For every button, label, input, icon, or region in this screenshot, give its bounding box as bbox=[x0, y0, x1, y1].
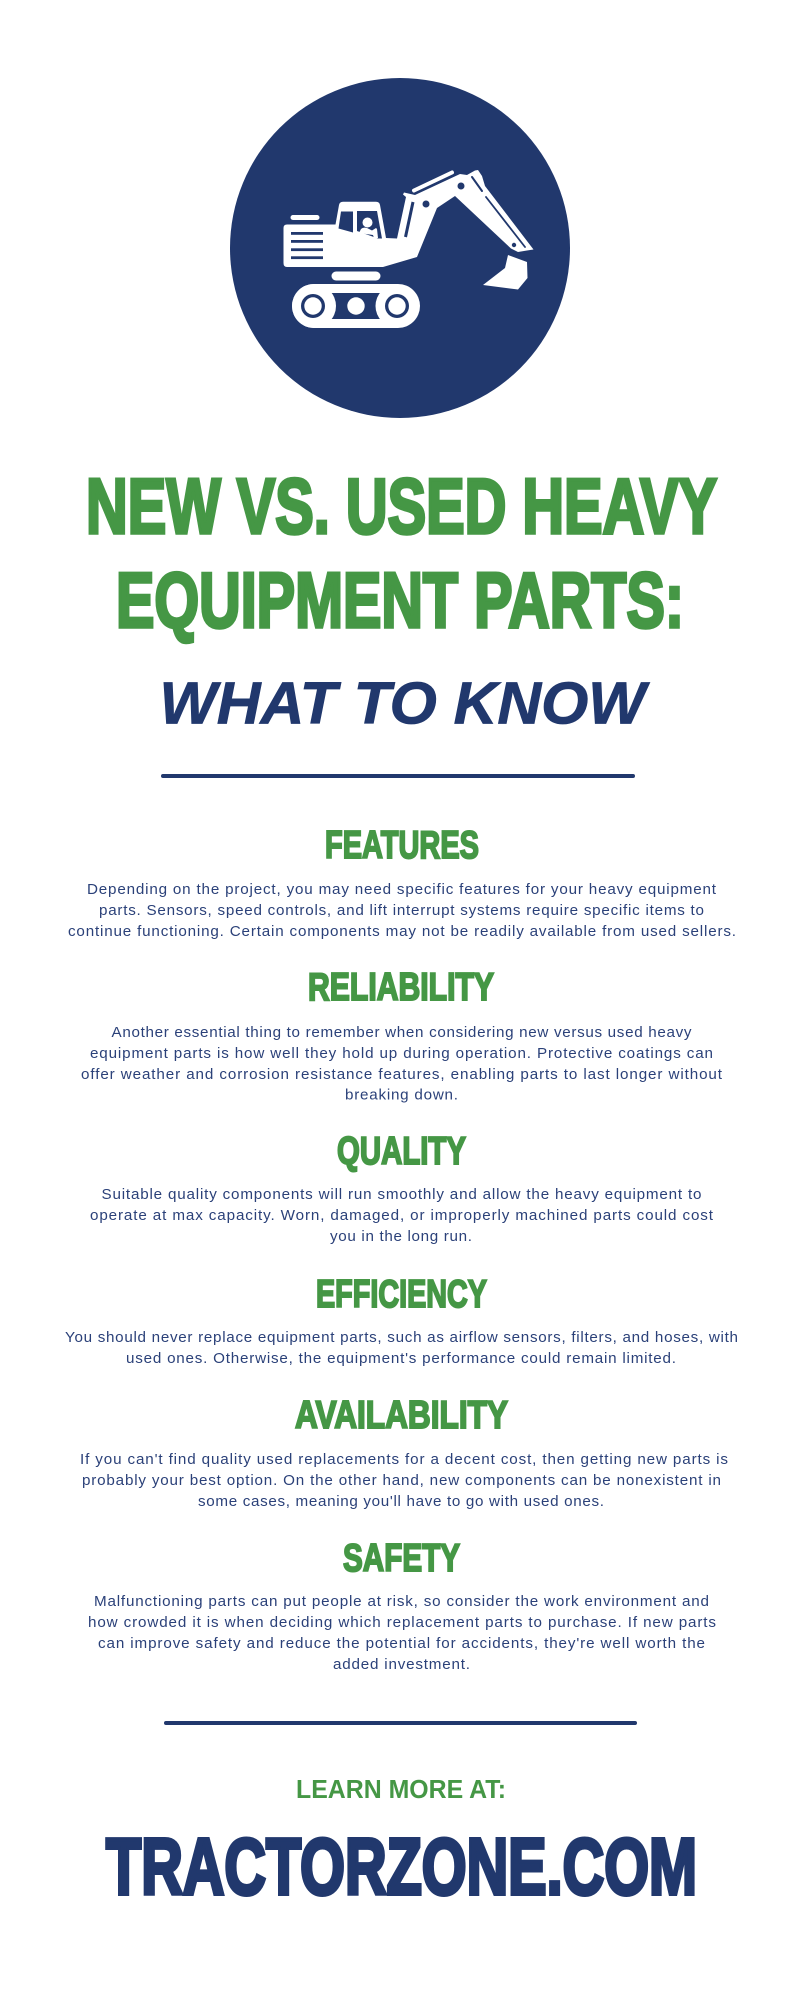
text block: features: Depending on the project, you may need specific features for your heavy equipment bbox=[87, 881, 717, 898]
text block: quality: you in the long run. bbox=[330, 1228, 472, 1245]
heading: efficiency: EFFICIENCY bbox=[316, 1273, 487, 1316]
text block: reliability: Another essential thing to remember when considering new versus used heavy bbox=[112, 1024, 692, 1041]
text block: reliability: offer weather and corrosion resistance features, enabling parts to last longer without bbox=[81, 1066, 723, 1083]
text block: safety: Malfunctioning parts can put people at risk, so consider the work environment and bbox=[94, 1593, 709, 1610]
panel: efficiency bbox=[65, 1273, 738, 1367]
text block: safety: how crowded it is when deciding which replacement parts to purchase. If new parts bbox=[88, 1614, 716, 1631]
text block: safety bbox=[88, 1593, 716, 1673]
text block: quality bbox=[90, 1186, 714, 1245]
text block: availability: probably your best option. On the other hand, new components can be nonexistent in bbox=[82, 1472, 721, 1489]
text block: availability: some cases, meaning you'll have to go with used ones. bbox=[198, 1493, 604, 1510]
text block: reliability: equipment parts is how well they hold up during operation. Protective coatings can bbox=[90, 1045, 713, 1062]
bottom divider bbox=[164, 1721, 637, 1725]
text block: reliability: breaking down. bbox=[345, 1086, 458, 1104]
heading: quality: QUALITY bbox=[337, 1130, 466, 1173]
panel: quality bbox=[90, 1130, 714, 1245]
text block: efficiency bbox=[65, 1329, 738, 1367]
excavator bucket bbox=[483, 255, 528, 290]
engine grille bbox=[291, 232, 323, 259]
heading: availability: AVAILABILITY bbox=[295, 1394, 508, 1437]
text block: safety: can improve safety and reduce the potential for accidents, they're well worth the bbox=[98, 1635, 705, 1652]
excavator cab and boom body bbox=[284, 170, 534, 267]
top divider bbox=[161, 774, 635, 778]
cab windows bbox=[338, 211, 382, 238]
operator figure bbox=[359, 218, 378, 238]
undercarriage bar bbox=[332, 272, 380, 280]
panel: features bbox=[68, 824, 736, 940]
text block: reliability bbox=[81, 1024, 723, 1104]
hood bar bbox=[290, 215, 320, 220]
heading: features: FEATURES bbox=[325, 824, 479, 867]
title bbox=[86, 462, 717, 644]
panel: availability bbox=[80, 1394, 728, 1510]
subtitle: WHAT TO KNOW bbox=[160, 670, 650, 736]
text block: features bbox=[68, 881, 736, 940]
text block: efficiency: used ones. Otherwise, the equipment's performance could remain limited. bbox=[126, 1350, 676, 1367]
heading: safety: SAFETY bbox=[343, 1537, 460, 1580]
panel: safety bbox=[88, 1537, 716, 1673]
text block: features: continue functioning. Certain components may not be readily available from used sellers. bbox=[68, 923, 736, 940]
crawler track bbox=[292, 284, 420, 328]
text block: features: parts. Sensors, speed controls, and lift interrupt systems require specific items to bbox=[99, 902, 704, 919]
text block: quality: operate at max capacity. Worn, damaged, or improperly machined parts could cost bbox=[90, 1207, 714, 1224]
text block: quality: Suitable quality components will run smoothly and allow the heavy equipment to bbox=[102, 1186, 702, 1203]
text block: efficiency: You should never replace equipment parts, such as airflow sensors, filters, and hoses, with bbox=[65, 1329, 738, 1346]
text block: safety: added investment. bbox=[333, 1656, 470, 1673]
text block: availability bbox=[80, 1451, 728, 1510]
icon: excavator in navy circle bbox=[230, 78, 570, 418]
boom and stick details bbox=[406, 177, 525, 247]
text block: availability: If you can't find quality used replacements for a decent cost, then getting new parts is bbox=[80, 1451, 728, 1468]
boom top bar bbox=[414, 172, 452, 190]
panel: reliability bbox=[81, 966, 723, 1104]
call to action label: LEARN MORE AT: bbox=[296, 1776, 506, 1804]
heading: reliability: RELIABILITY bbox=[308, 966, 494, 1009]
